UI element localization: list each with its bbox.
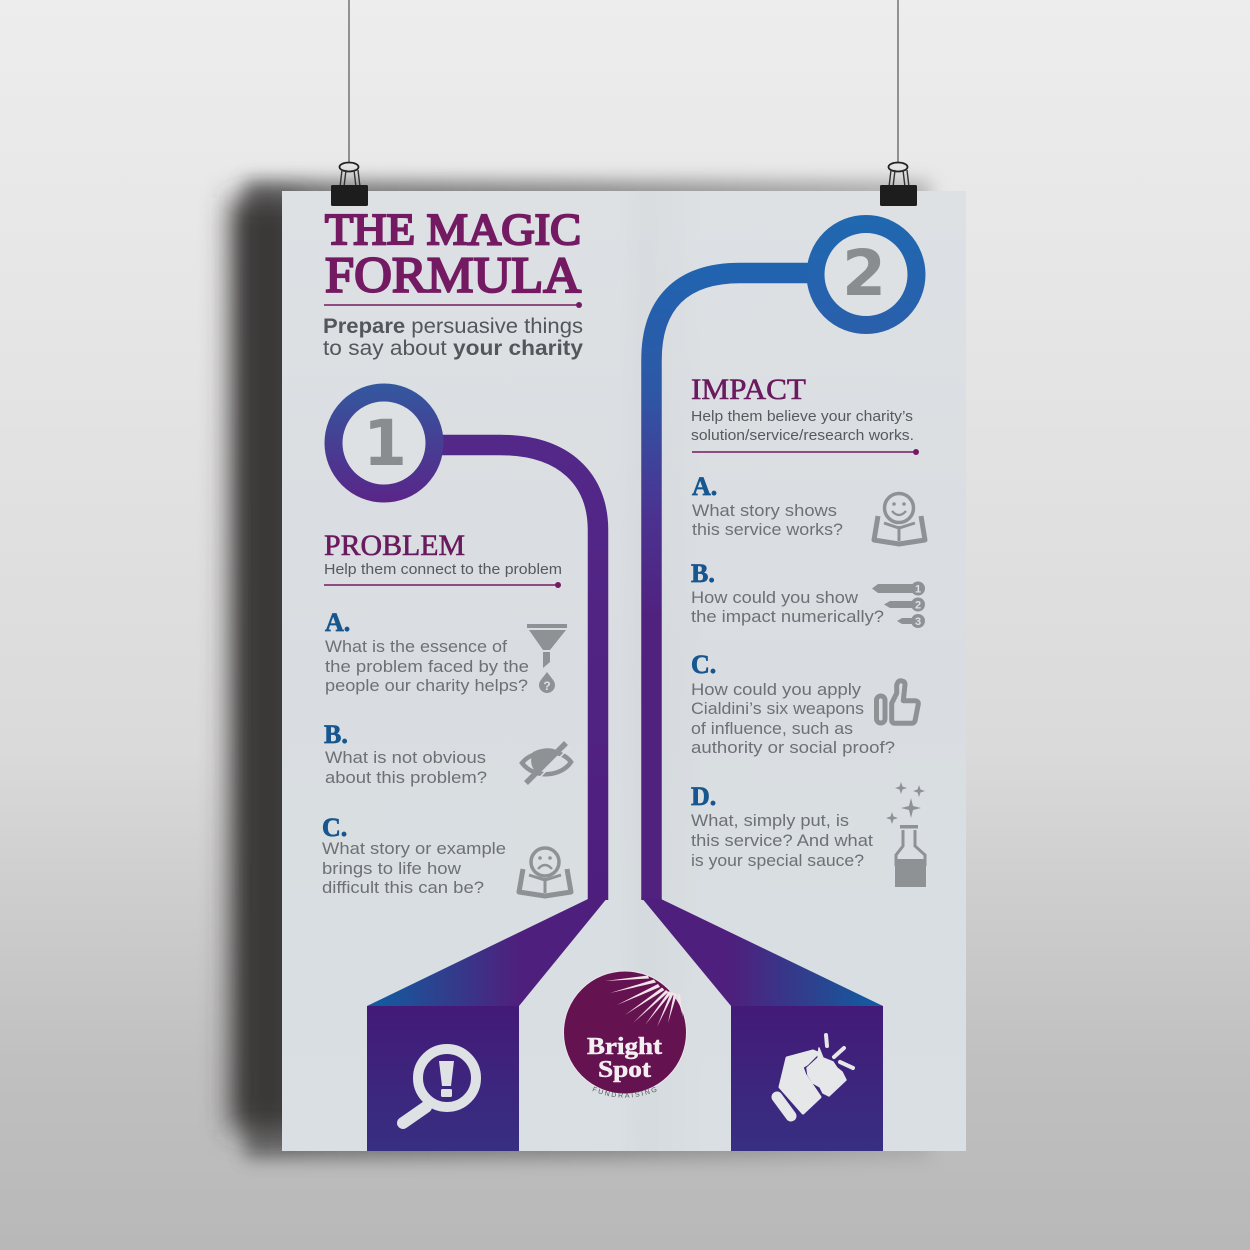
impact item D (691, 782, 873, 870)
title (325, 205, 581, 304)
icon: funnel with question drop (527, 624, 567, 693)
connector line 2 (652, 273, 812, 900)
icon: numbered ranking bars: 1 (915, 584, 921, 596)
problem item B: about this problem? (325, 768, 487, 787)
icon: numbered ranking bars: 3 (915, 616, 921, 628)
poster (282, 191, 966, 1151)
logo: Bright Spot Fundraising: FUNDRAISING (592, 1086, 656, 1098)
logo: Bright Spot Fundraising: Spot (598, 1057, 651, 1083)
impact item A: A. (692, 472, 717, 501)
heading: problem: PROBLEM (324, 529, 465, 562)
problem rule (324, 582, 561, 588)
title: FORMULA (325, 248, 581, 304)
panel: problem box (367, 1006, 519, 1151)
impact item A: this service works? (692, 520, 843, 539)
icon: numbered ranking bars: 2 (915, 600, 921, 612)
impact item C: C. (691, 650, 716, 679)
icon: sauce bottle with sparkles (886, 782, 926, 887)
number badge 1: 1 (363, 407, 407, 480)
title: THE MAGIC (325, 205, 581, 254)
impact item A: What story shows (692, 501, 837, 520)
problem item C: What story or example (322, 839, 506, 858)
impact item C: authority or social proof? (691, 738, 895, 757)
number badge 2 (816, 224, 916, 325)
impact item B: B. (691, 559, 715, 588)
impact rule (692, 449, 919, 455)
number badge 2: 2 (842, 237, 886, 310)
impact description: solution/service/research works. (691, 428, 914, 444)
impact item B: the impact numerically? (691, 607, 884, 626)
panel: impact box (731, 1006, 883, 1151)
problem description: Help them connect to the problem (324, 562, 562, 578)
logo: Bright Spot Fundraising: Bright (587, 1034, 662, 1060)
impact item B: How could you show (691, 588, 859, 607)
problem item A: A. (325, 608, 350, 637)
problem item C: difficult this can be? (322, 878, 484, 897)
connector line 1 (438, 445, 598, 900)
icon: crossed-out eye (522, 743, 571, 786)
problem item A: people our charity helps? (325, 676, 528, 695)
number badge 1 (334, 392, 434, 494)
problem item A: the problem faced by the (325, 657, 529, 676)
impact description (691, 409, 914, 444)
impact item B (691, 559, 884, 626)
impact item D: this service? And what (691, 831, 873, 850)
impact item D: What, simply put, is (691, 811, 849, 830)
icon: sad face over open book (519, 848, 571, 896)
icon: happy face over open book (874, 494, 925, 544)
impact item D: D. (691, 782, 716, 811)
icon: magnifier with exclamation (403, 1049, 476, 1123)
problem item C: C. (322, 813, 347, 842)
problem item C: brings to life how (322, 859, 462, 878)
title rule (324, 302, 582, 308)
problem item A (325, 608, 529, 695)
icon: numbered ranking bars (872, 582, 925, 628)
flare left (367, 897, 608, 1006)
binder clip: left (331, 162, 368, 206)
problem item B: B. (324, 720, 348, 749)
flare right (641, 897, 883, 1006)
logo: Bright Spot Fundraising (563, 970, 687, 1098)
impact item C (691, 650, 895, 757)
problem item B: What is not obvious (325, 748, 486, 767)
problem item A: What is the essence of (325, 637, 507, 656)
hanging string: right (897, 0, 899, 163)
impact item C: of influence, such as (691, 719, 853, 738)
binder clip: right (880, 162, 917, 206)
subtitle: Prepare persuasive things (323, 315, 583, 338)
icon: fist knocking (777, 1035, 853, 1116)
hanging string: left (348, 0, 350, 163)
icon: funnel with question drop: ? (543, 679, 551, 693)
impact description: Help them believe your charity’s (691, 409, 913, 425)
icon: thumbs up (876, 681, 918, 723)
impact item C: Cialdini’s six weapons (691, 699, 864, 718)
subtitle: to say about your charity (323, 337, 583, 360)
poster shadow (231, 181, 930, 1158)
problem item C (322, 813, 506, 897)
problem item B (324, 720, 487, 787)
subtitle (323, 315, 583, 360)
heading: impact: IMPACT (691, 373, 806, 406)
impact item C: How could you apply (691, 680, 862, 699)
impact item A (692, 472, 843, 539)
impact item D: is your special sauce? (691, 851, 864, 870)
